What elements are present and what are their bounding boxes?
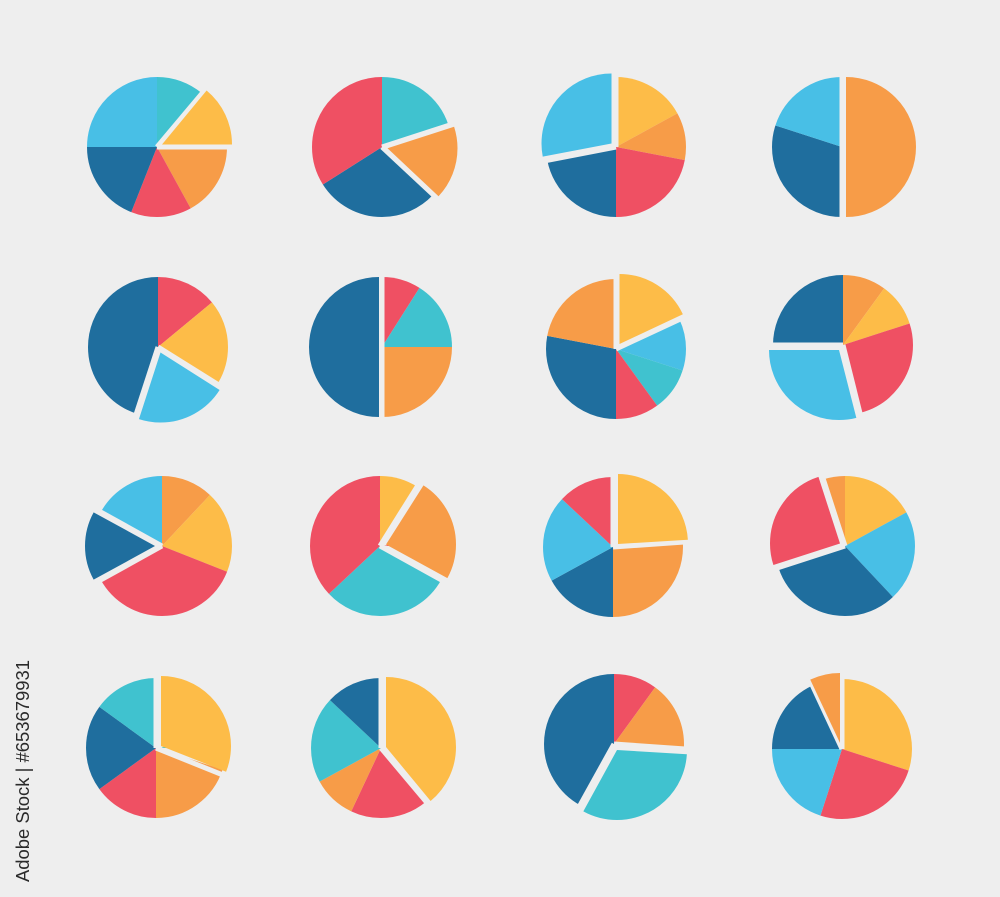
pie 14 — [346, 673, 429, 805]
pie 5 — [123, 312, 222, 418]
pie 2 — [347, 112, 453, 198]
pie 13 — [121, 673, 226, 783]
pie 9 — [96, 510, 197, 582]
pie 8 — [768, 310, 878, 418]
pie 11 — [578, 472, 688, 582]
stock id text: Adobe Stock | #653679931 — [13, 660, 33, 882]
pie 16 — [805, 674, 877, 784]
pie 3 — [542, 72, 651, 182]
pie 12 — [774, 475, 880, 581]
pie 6 — [344, 272, 417, 422]
pie 1 — [122, 90, 232, 182]
pie 4 — [807, 72, 881, 222]
pie 15 — [578, 709, 689, 810]
pie 7 — [581, 274, 684, 384]
pie 10 — [345, 482, 446, 582]
